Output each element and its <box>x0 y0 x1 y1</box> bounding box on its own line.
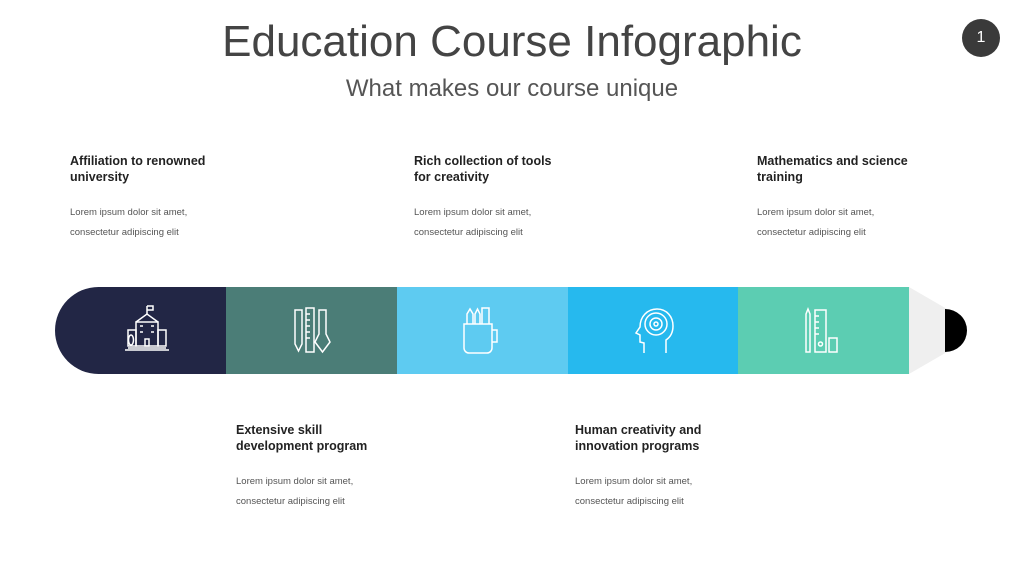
segment 5: math <box>738 287 909 374</box>
text block 4: Lorem ipsum dolor sit amet, <box>575 476 692 487</box>
text block 2: Lorem ipsum dolor sit amet, <box>236 476 353 487</box>
icon: building <box>125 305 169 351</box>
text block 1: consectetur adipiscing elit <box>70 227 179 238</box>
text block 2: Extensive skill <box>236 423 322 437</box>
text block 3: Lorem ipsum dolor sit amet, <box>414 207 531 218</box>
icon: pencil ruler pen <box>294 307 331 354</box>
text block 3 <box>414 154 552 238</box>
title: Education Course Infographic <box>222 17 802 66</box>
icon: pencil ruler eraser <box>805 307 838 353</box>
text block 1 <box>70 154 205 238</box>
text block 5 <box>757 154 908 238</box>
icon: head with maze <box>635 308 674 353</box>
text block 1: Affiliation to renowned <box>70 154 205 168</box>
text block 3: Rich collection of tools <box>414 154 552 168</box>
page number badge: 1 <box>977 29 985 46</box>
pencil bar <box>55 287 967 374</box>
text block 2: consectetur adipiscing elit <box>236 496 345 507</box>
text block 5: Mathematics and science <box>757 154 908 168</box>
text block 2: development program <box>236 439 367 453</box>
text block 4: consectetur adipiscing elit <box>575 496 684 507</box>
segment 1: university <box>55 287 226 374</box>
text block 4: innovation programs <box>575 439 699 453</box>
text block 1: Lorem ipsum dolor sit amet, <box>70 207 187 218</box>
text block 3: consectetur adipiscing elit <box>414 227 523 238</box>
text block 2 <box>236 423 367 507</box>
text block 3: for creativity <box>414 170 489 184</box>
icon: mug with brushes <box>463 307 498 354</box>
segment 2: tools <box>226 287 398 374</box>
page number badge <box>962 19 1000 57</box>
text block 5: training <box>757 170 803 184</box>
text block 1: university <box>70 170 129 184</box>
pencil tip <box>909 287 967 374</box>
subtitle: What makes our course unique <box>346 75 678 102</box>
segment 4: head maze <box>568 287 738 374</box>
segment 3: cup of tools <box>397 287 568 374</box>
text block 4 <box>575 423 701 507</box>
text block 5: consectetur adipiscing elit <box>757 227 866 238</box>
text block 5: Lorem ipsum dolor sit amet, <box>757 207 874 218</box>
text block 4: Human creativity and <box>575 423 701 437</box>
